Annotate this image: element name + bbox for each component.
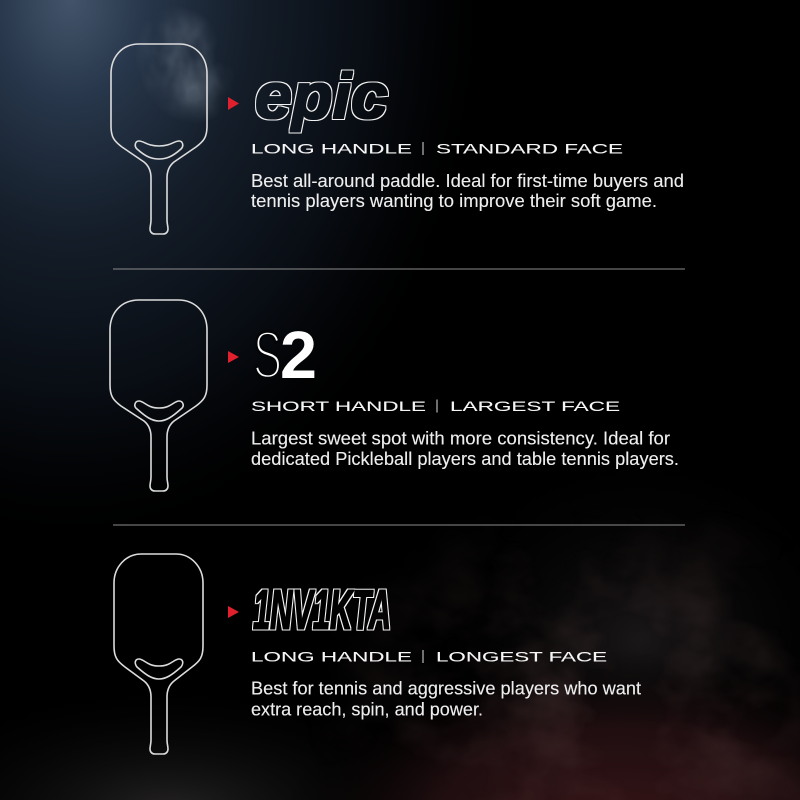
logo: s2: 2	[280, 318, 317, 393]
specs: epic: STANDARD FACE	[436, 140, 623, 156]
specs: invikta	[251, 648, 607, 664]
specs: epic	[251, 140, 623, 156]
paddle outline: invikta	[114, 554, 203, 754]
specs: invikta: LONG HANDLE	[251, 648, 412, 664]
smoke: top	[146, 13, 223, 117]
description: s2: Largest sweet spot with more consistency. Ideal for	[251, 428, 670, 448]
description: invikta: Best for tennis and aggressive players who want	[251, 678, 641, 698]
specs: epic: LONG HANDLE	[251, 140, 412, 156]
paddle outline: s2	[110, 300, 207, 491]
specs: s2: LARGEST FACE	[450, 398, 620, 414]
logo: s2	[253, 318, 317, 393]
description: epic	[251, 171, 684, 211]
logo: invikta: 1NV1KTA	[253, 578, 391, 642]
description: s2: dedicated Pickleball players and table tennis players.	[251, 449, 679, 469]
arrow: invikta	[228, 606, 239, 618]
section: epic	[111, 44, 684, 234]
description: invikta	[251, 678, 641, 720]
section: s2	[110, 300, 679, 491]
description: epic: tennis players wanting to improve their soft game.	[251, 191, 657, 211]
paddle outline: epic	[111, 44, 207, 234]
specs: invikta: LONGEST FACE	[436, 648, 607, 664]
arrow: epic	[228, 97, 239, 110]
description: invikta: extra reach, spin, and power.	[251, 700, 483, 720]
arrow: s2	[228, 351, 239, 363]
specs: s2	[251, 398, 620, 414]
description: epic: Best all-around paddle. Ideal for first-time buyers and	[251, 171, 684, 191]
logo: epic: epic	[255, 60, 388, 132]
description: s2	[251, 428, 679, 469]
smoke: bottom	[358, 558, 800, 792]
section: invikta	[114, 554, 641, 754]
logo: s2: S	[253, 318, 282, 393]
specs: s2: SHORT HANDLE	[251, 398, 426, 414]
